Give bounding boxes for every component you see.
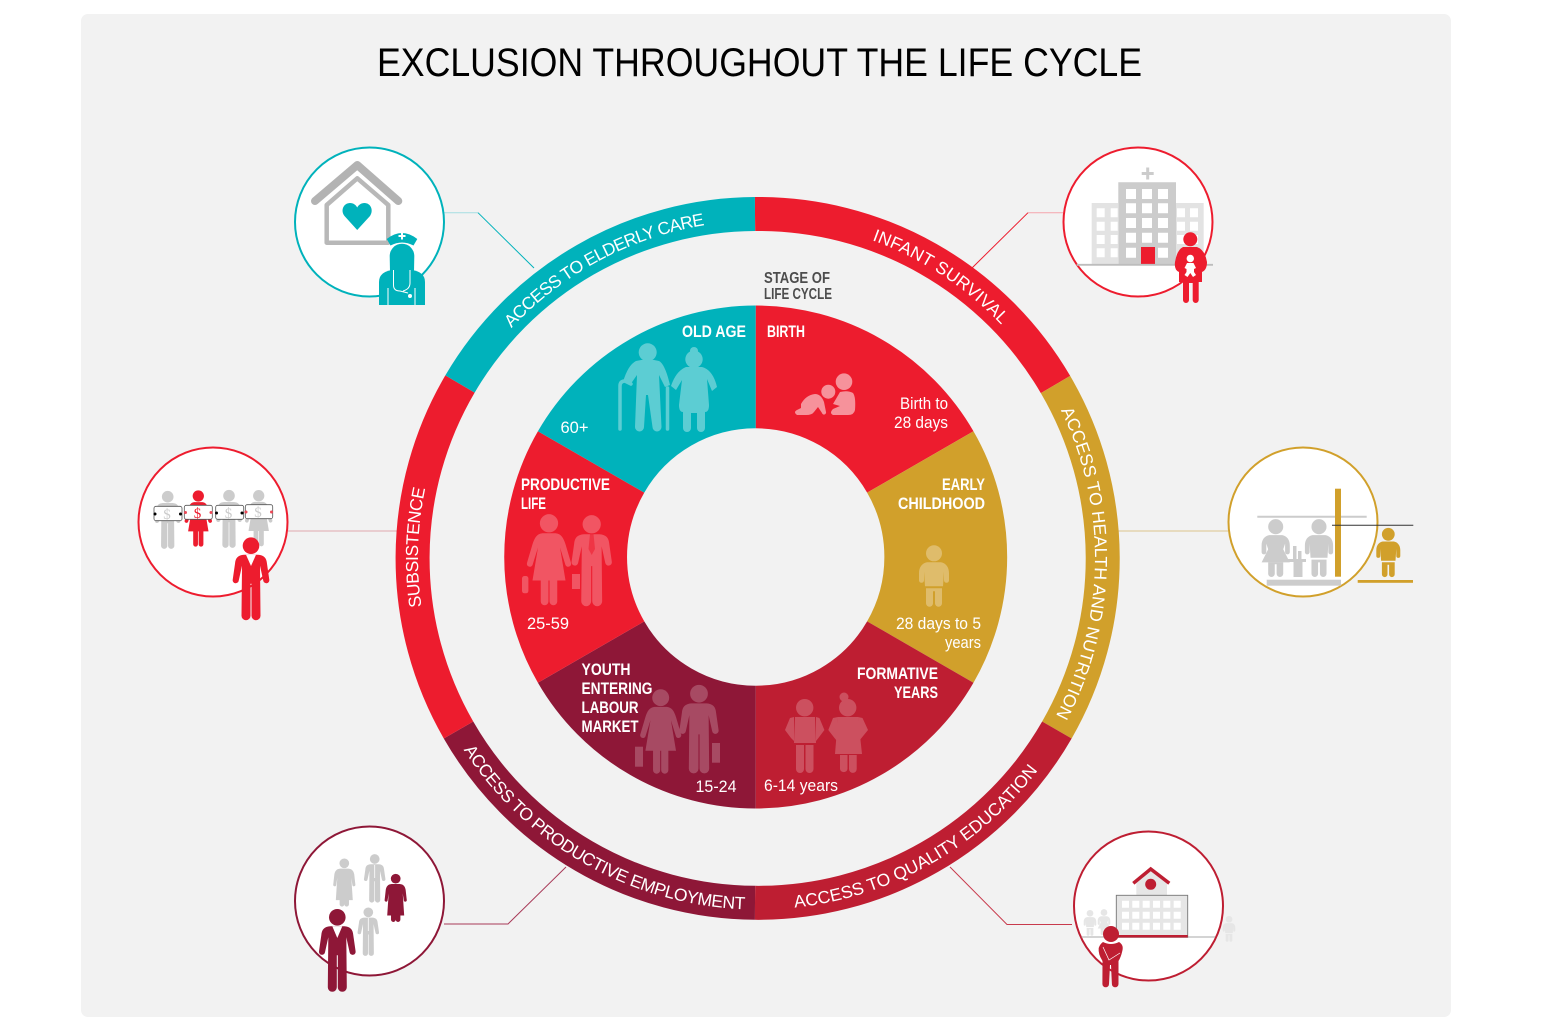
icon: people holding dollar signs: $ [194, 506, 202, 522]
icon: man in suit [319, 909, 356, 992]
sector: early childhood [920, 462, 946, 652]
badge: health and nutrition [1228, 448, 1413, 596]
label: formative years: FORMATIVE [857, 665, 938, 683]
height marker line [1332, 524, 1413, 526]
label: productive life: PRODUCTIVE [521, 476, 610, 494]
heading: stage of life cycle: LIFE CYCLE [764, 286, 832, 303]
icon: man in suit [233, 537, 269, 620]
icon: house roof [315, 165, 398, 201]
icon: youth couple with bags [635, 685, 720, 774]
icon: heart [343, 203, 372, 230]
icon: gold child [1376, 528, 1400, 577]
label: birth to 28 days [894, 395, 948, 432]
icon: faint background children [1084, 909, 1235, 942]
icon: elderly couple with canes [620, 343, 717, 432]
icon: house walls [327, 178, 388, 243]
icon: main hospital building [1118, 182, 1176, 264]
ring label: access to health and nutrition: ACCESS TO HEALTH AND NUTRITION [1056, 410, 1108, 720]
sector: youth entering labour market [591, 652, 756, 747]
label: 25-59: 25-59 [527, 615, 569, 633]
outer ring: access themes [413, 214, 1103, 903]
ring segment: health and nutrition [1056, 384, 1103, 730]
label: formative years [857, 665, 938, 702]
label: formative years: YEARS [894, 684, 938, 702]
label: youth entering labour market: YOUTH [582, 661, 630, 679]
icon: hospital cross [1142, 168, 1154, 180]
connector: quality education [950, 867, 1072, 924]
label: early childhood: CHILDHOOD [898, 495, 985, 513]
label: 15-24: 15-24 [696, 778, 736, 796]
label: youth entering labour market [582, 661, 652, 736]
connector: infant survival [972, 213, 1063, 268]
label: 28 days to 5 years: 28 days to 5 [896, 615, 981, 633]
ground line [1077, 264, 1213, 266]
ring segment: subsistence [413, 384, 460, 730]
icon: grey children and table [1262, 519, 1341, 586]
sector: old age [591, 367, 756, 462]
ring label: access to elderly care: ACCESS TO ELDERLY CARE [506, 213, 704, 328]
label: birth to 28 days: Birth to [900, 395, 948, 413]
ring label: subsistence: SUBSISTENCE [406, 487, 426, 607]
label: productive life [521, 476, 610, 513]
icon: school children with backpacks [785, 692, 868, 773]
connector: health and nutrition [1118, 530, 1228, 532]
title: EXCLUSION THROUGHOUT THE LIFE CYCLE [377, 41, 1142, 85]
icon: necktie on working man [588, 534, 595, 555]
ground line [1082, 936, 1215, 938]
icon: working couple [522, 514, 612, 606]
connector: productive employment [444, 867, 566, 924]
label: early childhood [898, 476, 985, 513]
icon: school roof [1133, 869, 1169, 883]
ring segment: productive employment [458, 730, 755, 903]
ring segment: infant survival [755, 214, 1056, 384]
sector: productive life [566, 462, 591, 652]
heading: stage of life cycle: STAGE OF [764, 270, 830, 287]
ring label: access to quality education: ACCESS TO QUALITY EDUCATION [794, 764, 1037, 908]
label: old age: OLD AGE [682, 323, 746, 341]
sector: formative years [756, 652, 920, 747]
icon: young child [919, 545, 949, 607]
icon: people holding dollar signs: $ [225, 506, 233, 522]
icon: nurse [379, 232, 425, 305]
badge: elderly care [295, 148, 444, 305]
icon: people holding dollar signs [154, 490, 273, 549]
icon: group of workers [333, 854, 407, 956]
icon: crawling babies [795, 373, 855, 415]
ring segment: quality education [755, 730, 1057, 903]
badge: productive employment [295, 826, 444, 992]
icon: gold base [1358, 580, 1413, 583]
icon: school tower [1136, 871, 1167, 895]
label: 28 days to 5 years [896, 615, 981, 652]
connector: subsistence [288, 530, 397, 532]
icon: people holding dollar signs: $ [163, 507, 171, 523]
ring segment: elderly care [460, 214, 755, 384]
inner donut: stages of life cycle [566, 367, 946, 747]
label: productive life: LIFE [521, 495, 546, 513]
circle [295, 148, 444, 296]
label: 28 days to 5 years: years [945, 634, 981, 652]
shelf [1257, 516, 1367, 518]
sector: birth [756, 367, 920, 462]
icon: hospital door [1141, 247, 1155, 264]
badge: infant survival [1064, 148, 1213, 303]
label: early childhood: EARLY [942, 476, 985, 494]
label: birth to 28 days: 28 days [894, 414, 948, 432]
icon: child with folded arms [1099, 926, 1123, 987]
label: 6-14 years: 6-14 years [764, 777, 838, 795]
circle [1064, 148, 1212, 296]
label: 60+: 60+ [560, 419, 588, 437]
icon: people holding dollar signs: $ [254, 505, 262, 521]
heading: stage of life cycle [764, 270, 832, 303]
circle [138, 448, 288, 596]
icon: school clock [1145, 879, 1156, 890]
icon: side buildings [1092, 203, 1204, 264]
circle [1074, 832, 1223, 980]
circle [1228, 448, 1378, 596]
badge: quality education [1074, 832, 1235, 987]
ring label: access to productive employment: ACCESS TO PRODUCTIVE EMPLOYMENT [464, 747, 746, 910]
connector: elderly care [444, 213, 534, 268]
circle [295, 826, 444, 976]
icon: mother and baby [1175, 232, 1207, 303]
label: youth entering labour market: ENTERING [582, 680, 652, 698]
badge: subsistence [138, 448, 288, 620]
label: youth entering labour market: LABOUR [582, 699, 639, 717]
label: birth: BIRTH [767, 323, 805, 341]
label: youth entering labour market: MARKET [582, 718, 638, 736]
icon: height ruler [1335, 489, 1341, 577]
icon: school building [1116, 895, 1188, 938]
ring label: infant survival: INFANT SURVIVAL [874, 229, 1006, 324]
